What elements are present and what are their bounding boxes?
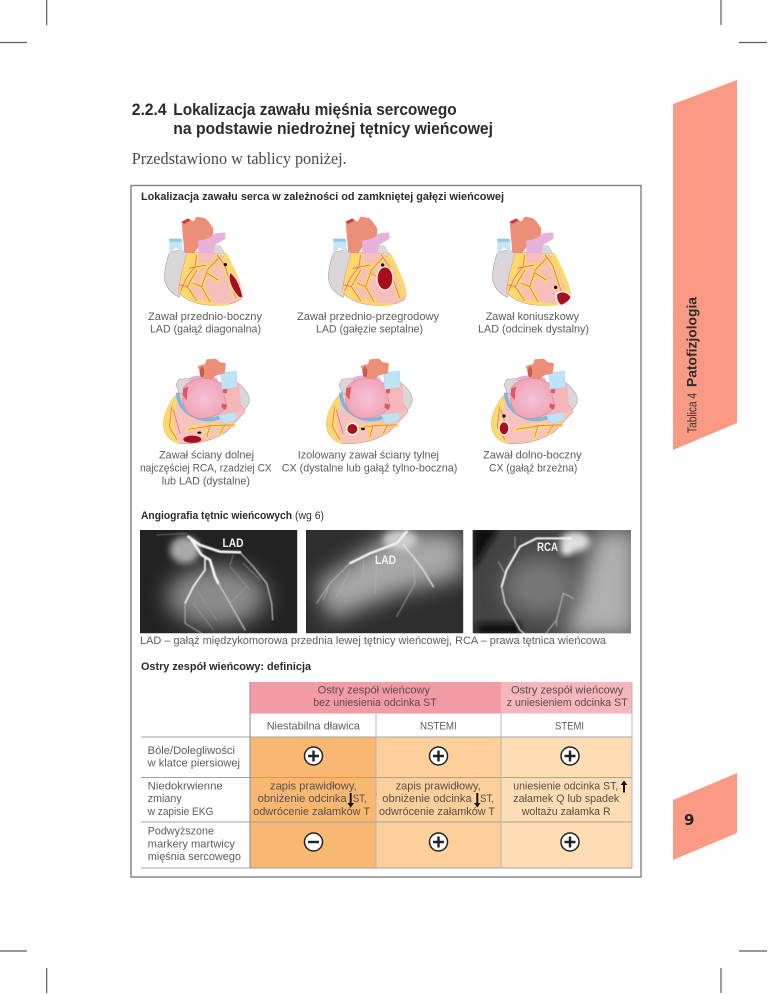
ECG cell: NSTEMI [379,780,495,818]
angiogram 1 label: LAD [222,538,244,550]
caption: apical: Zawał koniuszkowy [486,311,579,323]
caption: posterior: Izolowany zawał ściany tylnej [298,449,439,461]
panel title: infarct location: Lokalizacja zawału serca w zależności od zamkniętej gałęzi wieńcowej [141,191,504,203]
caption: anterolateral [148,311,262,336]
row label: chest pain: w klatce piersiowej [147,758,240,770]
row label: ECG changes: zmiany [148,793,182,805]
table header: with ST elevation: z uniesieniem odcinka ST [507,697,628,709]
ECG cell: NSTEMI: ST, [480,793,494,805]
section heading: na podstawie niedrożnej tętnicy wieńcowej [173,120,493,138]
caption: anteroseptal: LAD (gałęzie septalne) [316,324,423,336]
heart: isolated posterior infarct [326,359,412,444]
caption: inferolateral [483,449,582,475]
plus icons, chest pain row [304,747,579,765]
ECG cell: STEMI: uniesienie odcinka ST, [513,780,618,792]
caption: posterior: CX (dystalne lub gałąź tylno-boczna) [282,463,457,475]
table header: with ST elevation [501,682,632,714]
angiogram 3 label: RCA [537,542,558,554]
ECG cell: NSTEMI: obniżenie odcinka [382,793,473,805]
caption: inferolateral: CX (gałąź brzeżna) [489,463,577,475]
side tab: Tablica 4 Patofizjologia [673,80,737,450]
angiogram 3: RCA [472,530,631,634]
table: ACS definition [141,682,632,868]
table sub-headers: STEMI [555,720,584,732]
table header: with ST elevation: Ostry zespół wieńcowy [511,684,624,696]
table column fills [250,737,632,868]
intro text: Przedstawiono w tablicy poniżej. [132,149,347,168]
heart: apical infarct [492,217,571,306]
table header: without ST elevation: Ostry zespół wieńcowy [318,684,430,696]
ECG cell: unstable angina: zapis prawidłowy, [270,780,357,792]
table header: without ST elevation [250,682,501,714]
row label: ECG changes [147,780,223,818]
page number tab [673,773,737,860]
heart: inferolateral infarct [491,359,577,444]
caption: inferior: Zawał ściany dolnej [159,449,254,461]
ECG cell: STEMI: załamek Q lub spadek [513,793,620,805]
angiogram 2 label: LAD [375,555,396,567]
caption: inferior: najczęściej RCA, rzadziej CX [140,463,272,475]
row label: ECG changes: w zapisie EKG [147,806,213,818]
side tab: Tablica 4 Patofizjologia: Tablica 4 [684,393,700,433]
heading: angiography: Angiografia tętnic wieńcowych [141,510,292,522]
heart: anterolateral infarct [164,217,243,306]
caption: posterior [282,449,457,475]
ECG cell: unstable angina: ST, [353,793,367,805]
side tab: Tablica 4 Patofizjologia: Patofizjologia [684,297,700,387]
row label: chest pain: Bóle/Dolegliwości [148,745,235,757]
heading: angiography: (wg 6) [295,510,324,522]
section heading: 2.2.4 [132,101,167,119]
row label: markers [148,825,241,863]
heart: anteroseptal infarct [328,217,406,306]
angiogram 2: LAD [306,530,463,633]
table header: without ST elevation: bez uniesienia odcinka ST [313,697,437,709]
caption: anteroseptal: Zawał przednio-przegrodowy [297,311,440,323]
ECG cell: NSTEMI: zapis prawidłowy, [396,780,481,792]
panel: main table frame [131,186,641,877]
ECG cell: STEMI [513,780,627,818]
ECG cell: unstable angina: odwrócenie załamków T [253,806,370,818]
caption: anterolateral: LAD (gałąź diagonalna) [150,324,261,336]
table sub-headers: NSTEMI [420,720,457,732]
angiogram 1: LAD [140,530,297,633]
caption: anteroseptal [297,311,440,336]
caption: anterolateral: Zawał przednio-boczny [148,311,262,323]
caption: inferior: lub LAD (dystalne) [162,475,250,487]
caption: inferolateral: Zawał dolno-boczny [483,449,582,461]
ECG cell: STEMI: woltażu załamka R [521,806,611,818]
ECG cell: unstable angina [253,780,370,818]
row label: ECG changes: Niedokrwienne [148,780,223,792]
row label: chest pain [147,745,240,770]
row label: markers: Podwyższone [148,825,214,837]
row label: markers: markery martwicy [148,838,236,850]
table sub-headers: Niestabilna dławica [267,720,361,732]
page number tab: 9 [684,811,694,829]
angiography caption: LAD – gałąź międzykomorowa przednia lewej tętnicy wieńcowej, RCA – prawa tętnica wieńcowa [140,635,607,647]
section heading [132,101,493,138]
ECG cell: unstable angina: obniżenie odcinka [258,793,348,805]
heading: ACS definition: Ostry zespół wieńcowy: definicja [141,661,312,673]
marker icons: minus, plus, plus [304,833,579,851]
row label: markers: mięśnia sercowego [148,851,241,863]
caption: apical [478,311,589,336]
ECG cell: NSTEMI: odwrócenie załamków T [379,806,495,818]
table sub-headers [267,720,584,732]
caption: apical: LAD (odcinek dystalny) [478,324,589,336]
section heading: Lokalizacja zawału mięśnia sercowego [173,101,457,119]
caption: inferior [140,449,272,487]
heart: inferior infarct [163,359,249,444]
